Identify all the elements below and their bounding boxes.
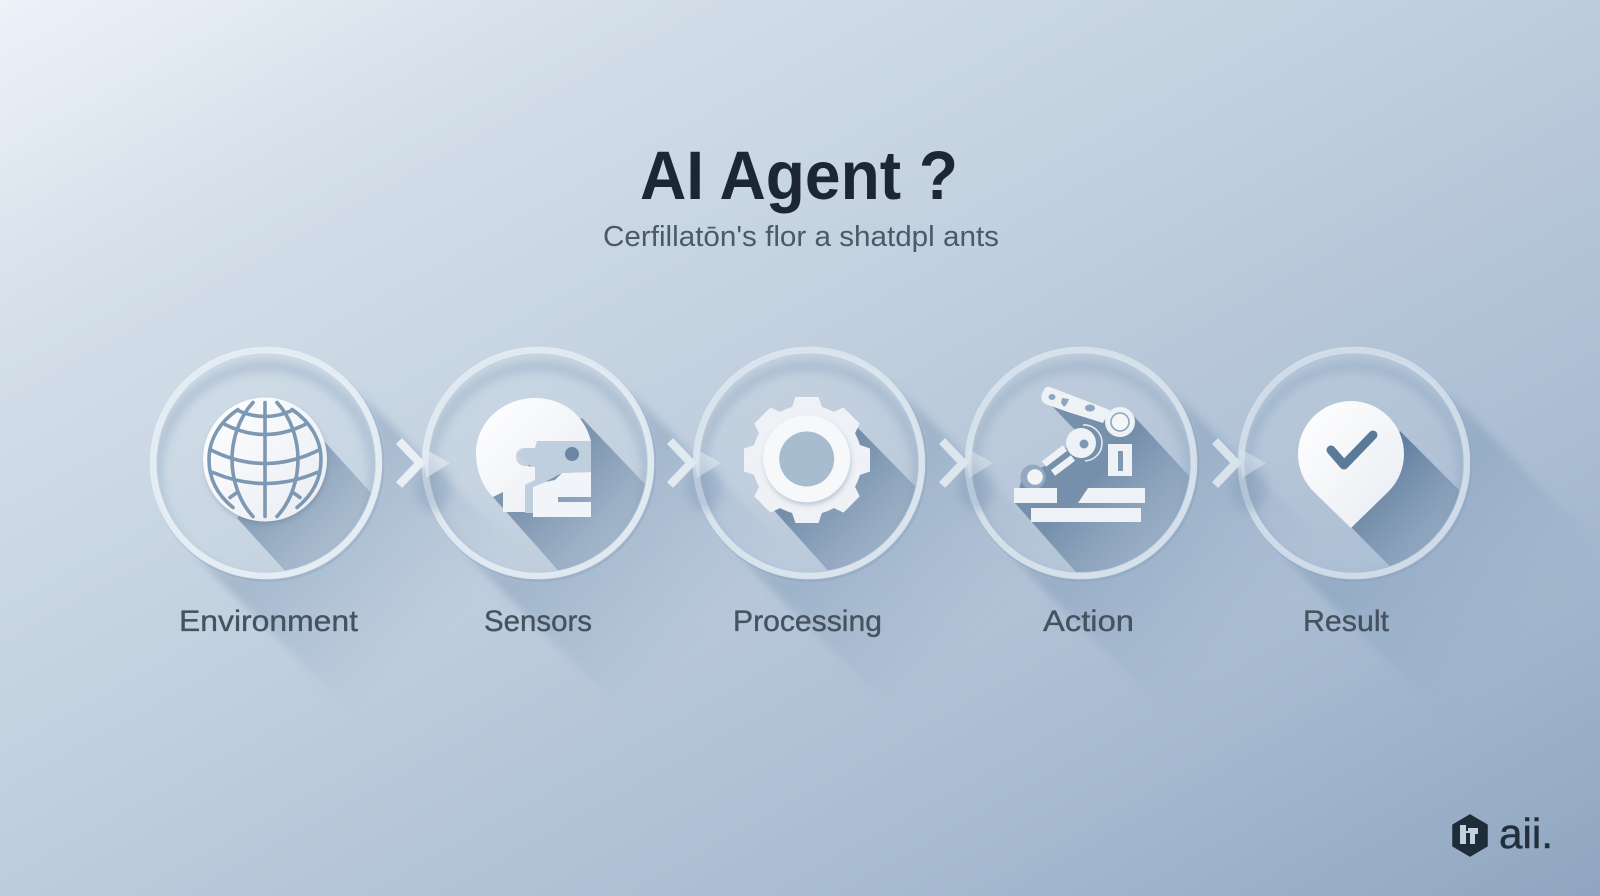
ring — [1240, 350, 1470, 580]
column — [1108, 444, 1132, 476]
long shadow of circle — [999, 381, 1343, 725]
gap behind face — [516, 441, 591, 513]
long shadow of circle — [1272, 381, 1600, 725]
disc — [699, 353, 919, 573]
icon shadow — [774, 428, 916, 570]
long shadow of circle — [727, 381, 1071, 725]
disc — [156, 353, 376, 573]
icon shadow — [1015, 406, 1189, 572]
long shadow of circle — [184, 381, 528, 725]
label: Sensors: Sensors — [484, 605, 592, 638]
ring — [152, 350, 382, 580]
logo — [1453, 810, 1553, 857]
step 1: environment — [150, 346, 474, 672]
ball — [1020, 464, 1046, 490]
disc inner shadow — [157, 358, 375, 532]
gripper fingers — [1044, 448, 1065, 464]
icon shadow — [493, 418, 645, 570]
step 5: result — [1238, 346, 1546, 649]
arrow 4 — [1215, 441, 1267, 512]
label: Action: Action — [1043, 605, 1134, 638]
icon: pin with check — [1298, 401, 1404, 528]
arrow 3 — [942, 441, 994, 512]
label: Environment: Environment — [179, 605, 359, 638]
step 4: action — [964, 346, 1278, 657]
disc inner shadow — [430, 358, 647, 524]
wrist — [1083, 425, 1102, 461]
disc — [1244, 353, 1464, 573]
shoulder joint — [1105, 407, 1135, 437]
disc inner shadow — [700, 358, 918, 520]
label: Result: Result — [1303, 605, 1390, 638]
arrow 1 — [399, 441, 451, 512]
icon shadow — [237, 442, 371, 570]
ring — [968, 350, 1198, 580]
long shadow of circle — [456, 381, 800, 725]
icon shadow — [1352, 431, 1460, 566]
head — [476, 398, 591, 512]
step 2: sensors — [422, 346, 742, 666]
logo text: aii. — [1499, 810, 1553, 857]
disc — [428, 353, 648, 573]
ring — [696, 350, 926, 580]
icon: globe — [203, 398, 327, 522]
disc inner shadow — [972, 359, 1190, 514]
step 3: processing — [692, 346, 1006, 664]
subtitle: Cerfillatōn's flor a shatdpl ants — [603, 221, 999, 253]
platforms — [1014, 488, 1057, 503]
icon: head sensor — [476, 398, 591, 517]
disc — [971, 353, 1191, 573]
logo mark — [1453, 815, 1487, 856]
title: AI Agent ? — [640, 137, 958, 214]
disc inner shadow — [1246, 360, 1463, 490]
upper arm — [1041, 387, 1110, 423]
sensor block — [533, 472, 591, 517]
sensor dot — [565, 447, 579, 461]
label: Processing: Processing — [733, 605, 882, 638]
icon: gear — [744, 397, 870, 523]
icon: robot arm — [1014, 387, 1145, 522]
arrow 2 — [670, 441, 722, 512]
ring — [424, 350, 654, 580]
